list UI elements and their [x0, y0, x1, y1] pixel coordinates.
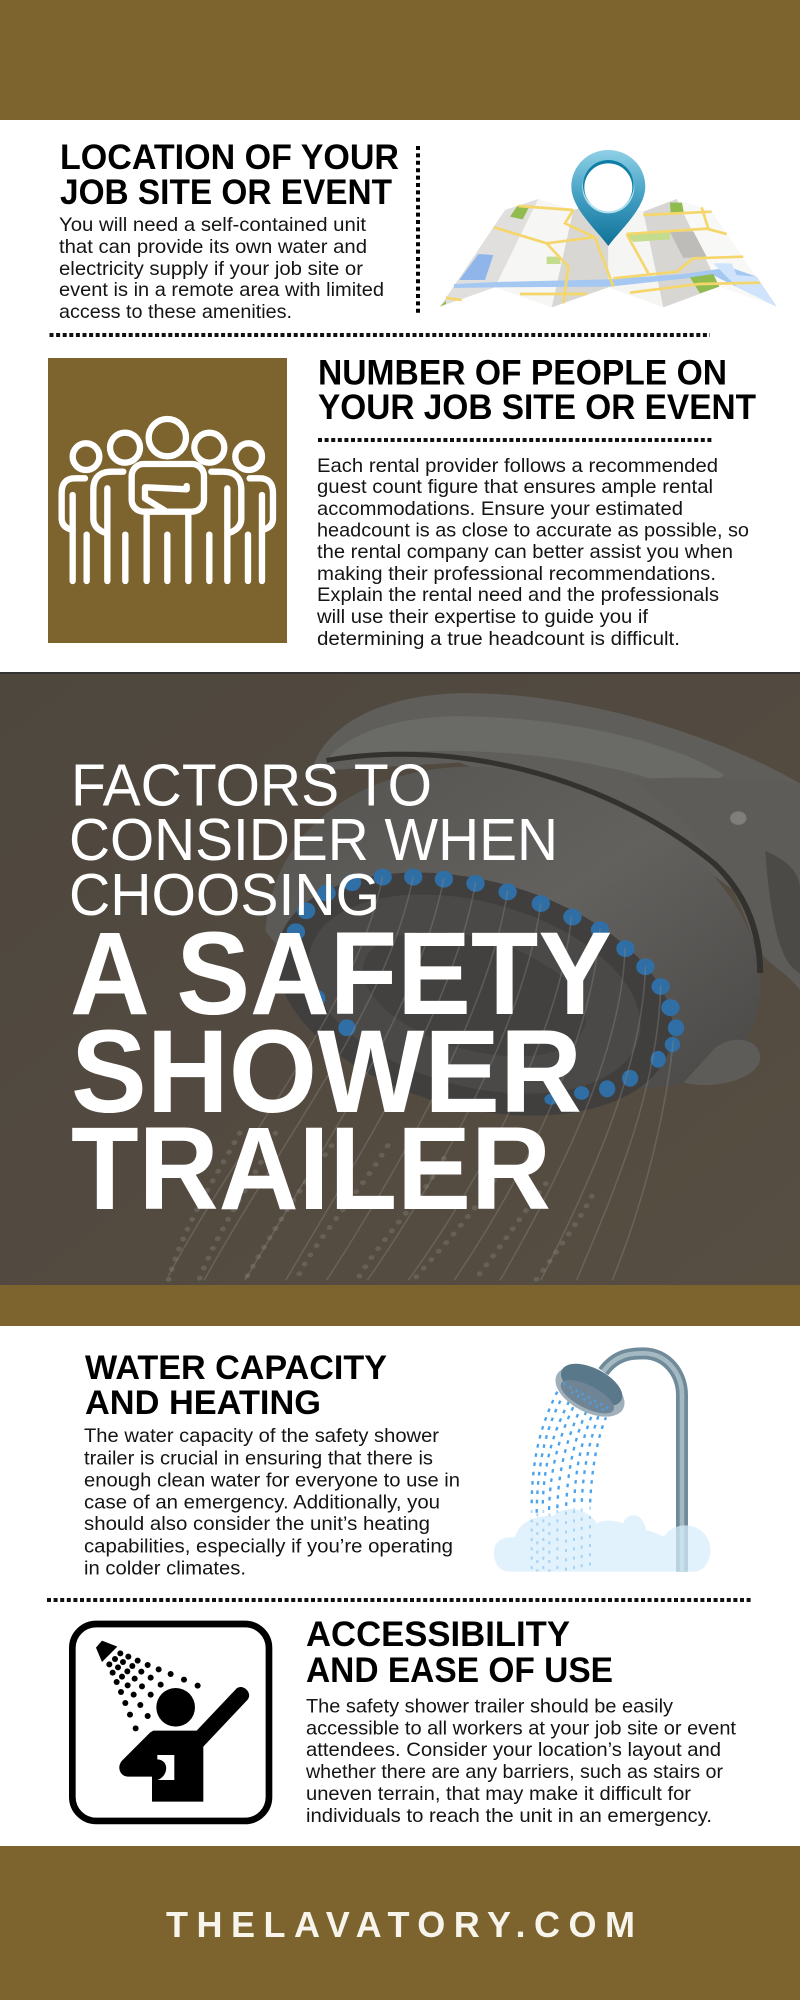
text block: accessibility: individuals to reach the unit in an emergency.	[306, 1805, 712, 1827]
panel: number of people	[48, 354, 756, 650]
text block: number of people: Explain the rental need and the professionals	[317, 584, 719, 606]
footer website text: THELAVATORY.COM	[166, 1904, 635, 1945]
heading: number of people: YOUR JOB SITE OR EVENT	[318, 388, 756, 427]
text block: location: electricity supply if your job site or	[59, 258, 364, 280]
panel: water capacity and heating	[84, 1349, 710, 1580]
title: factors to consider when choosing: CHOOSING	[69, 862, 380, 928]
heading: accessibility: ACCESSIBILITY	[306, 1615, 570, 1654]
panel: location of your job site	[59, 138, 777, 323]
text block: water capacity: trailer is crucial in ensuring that there is	[84, 1447, 433, 1469]
title: factors to consider when choosing: FACTORS TO	[71, 752, 432, 818]
title: a safety shower trailer: A SAFETY	[70, 908, 612, 1040]
heading: location: JOB SITE OR EVENT	[60, 173, 392, 212]
title: factors to consider when choosing: CONSIDER WHEN	[69, 807, 558, 873]
text block: number of people: determining a true headcount is difficult.	[317, 628, 680, 650]
photo: shower head	[168, 693, 800, 1280]
heading: accessibility	[306, 1615, 613, 1690]
text block: water capacity: enough clean water for everyone to use in	[84, 1470, 460, 1492]
title: a safety shower trailer: SHOWER	[71, 1006, 582, 1138]
title: factors to consider when choosing	[69, 752, 558, 928]
text block: location: You will need a self-contained unit	[59, 214, 367, 236]
text block: number of people: will use their expertise to guide you if	[316, 606, 649, 628]
text block: accessibility: uneven terrain, that may make it difficult for	[306, 1783, 692, 1805]
heading: water capacity: WATER CAPACITY	[85, 1349, 387, 1387]
text block: water capacity: in colder climates.	[84, 1558, 246, 1580]
title: a safety shower trailer: TRAILER	[71, 1103, 551, 1235]
icon: shower head with water	[494, 1353, 710, 1572]
icon: group of people	[62, 419, 273, 581]
hero panel: shower head photo with title	[0, 672, 800, 1285]
heading: accessibility: AND EASE OF USE	[306, 1651, 613, 1690]
text block: number of people: the rental company can better assist you when	[317, 541, 733, 563]
text block: number of people	[316, 455, 749, 650]
heading: number of people: NUMBER OF PEOPLE ON	[318, 354, 727, 392]
text block: accessibility: The safety shower trailer should be easily	[306, 1696, 673, 1718]
brown icon tile	[48, 358, 287, 643]
text block: water capacity	[84, 1425, 460, 1580]
brown band below hero	[0, 1285, 800, 1326]
heading: water capacity	[85, 1349, 387, 1422]
text block: location: that can provide its own water and	[59, 236, 367, 258]
text block: accessibility: accessible to all workers at your job site or event	[306, 1718, 737, 1740]
text block: water capacity: The water capacity of the safety shower	[84, 1425, 440, 1447]
title: a safety shower trailer	[70, 908, 612, 1235]
top band	[0, 0, 800, 120]
icon: person under safety shower	[72, 1624, 269, 1821]
text block: water capacity: capabilities, especially if you’re operating	[84, 1535, 453, 1557]
text block: number of people: guest count figure that ensures ample rental	[317, 476, 713, 498]
text block: accessibility: whether there are any barriers, such as stairs or	[305, 1761, 724, 1783]
text block: number of people: making their professional recommendations.	[317, 563, 716, 585]
footer band	[0, 1846, 800, 2000]
heading: number of people	[318, 354, 756, 427]
text block: accessibility: attendees. Consider your location’s layout and	[306, 1739, 721, 1761]
text block: location: access to these amenities.	[59, 301, 292, 323]
icon: folded map with pin	[440, 150, 777, 307]
heading: location	[60, 138, 399, 212]
text block: location: event is in a remote area with limited	[59, 279, 384, 301]
text block: water capacity: should also consider the unit’s heating	[84, 1513, 430, 1535]
text block: location	[59, 214, 384, 323]
panel: accessibility and ease of use	[72, 1615, 737, 1827]
heading: location: LOCATION OF YOUR	[60, 138, 399, 177]
text block: water capacity: case of an emergency. Additionally, you	[84, 1492, 440, 1514]
text block: number of people: accommodations. Ensure your estimated	[317, 498, 683, 520]
text block: accessibility	[305, 1696, 737, 1827]
heading: water capacity: AND HEATING	[85, 1384, 321, 1422]
text block: number of people: Each rental provider follows a recommended	[317, 455, 718, 477]
text block: number of people: headcount is as close to accurate as possible, so	[317, 520, 749, 542]
